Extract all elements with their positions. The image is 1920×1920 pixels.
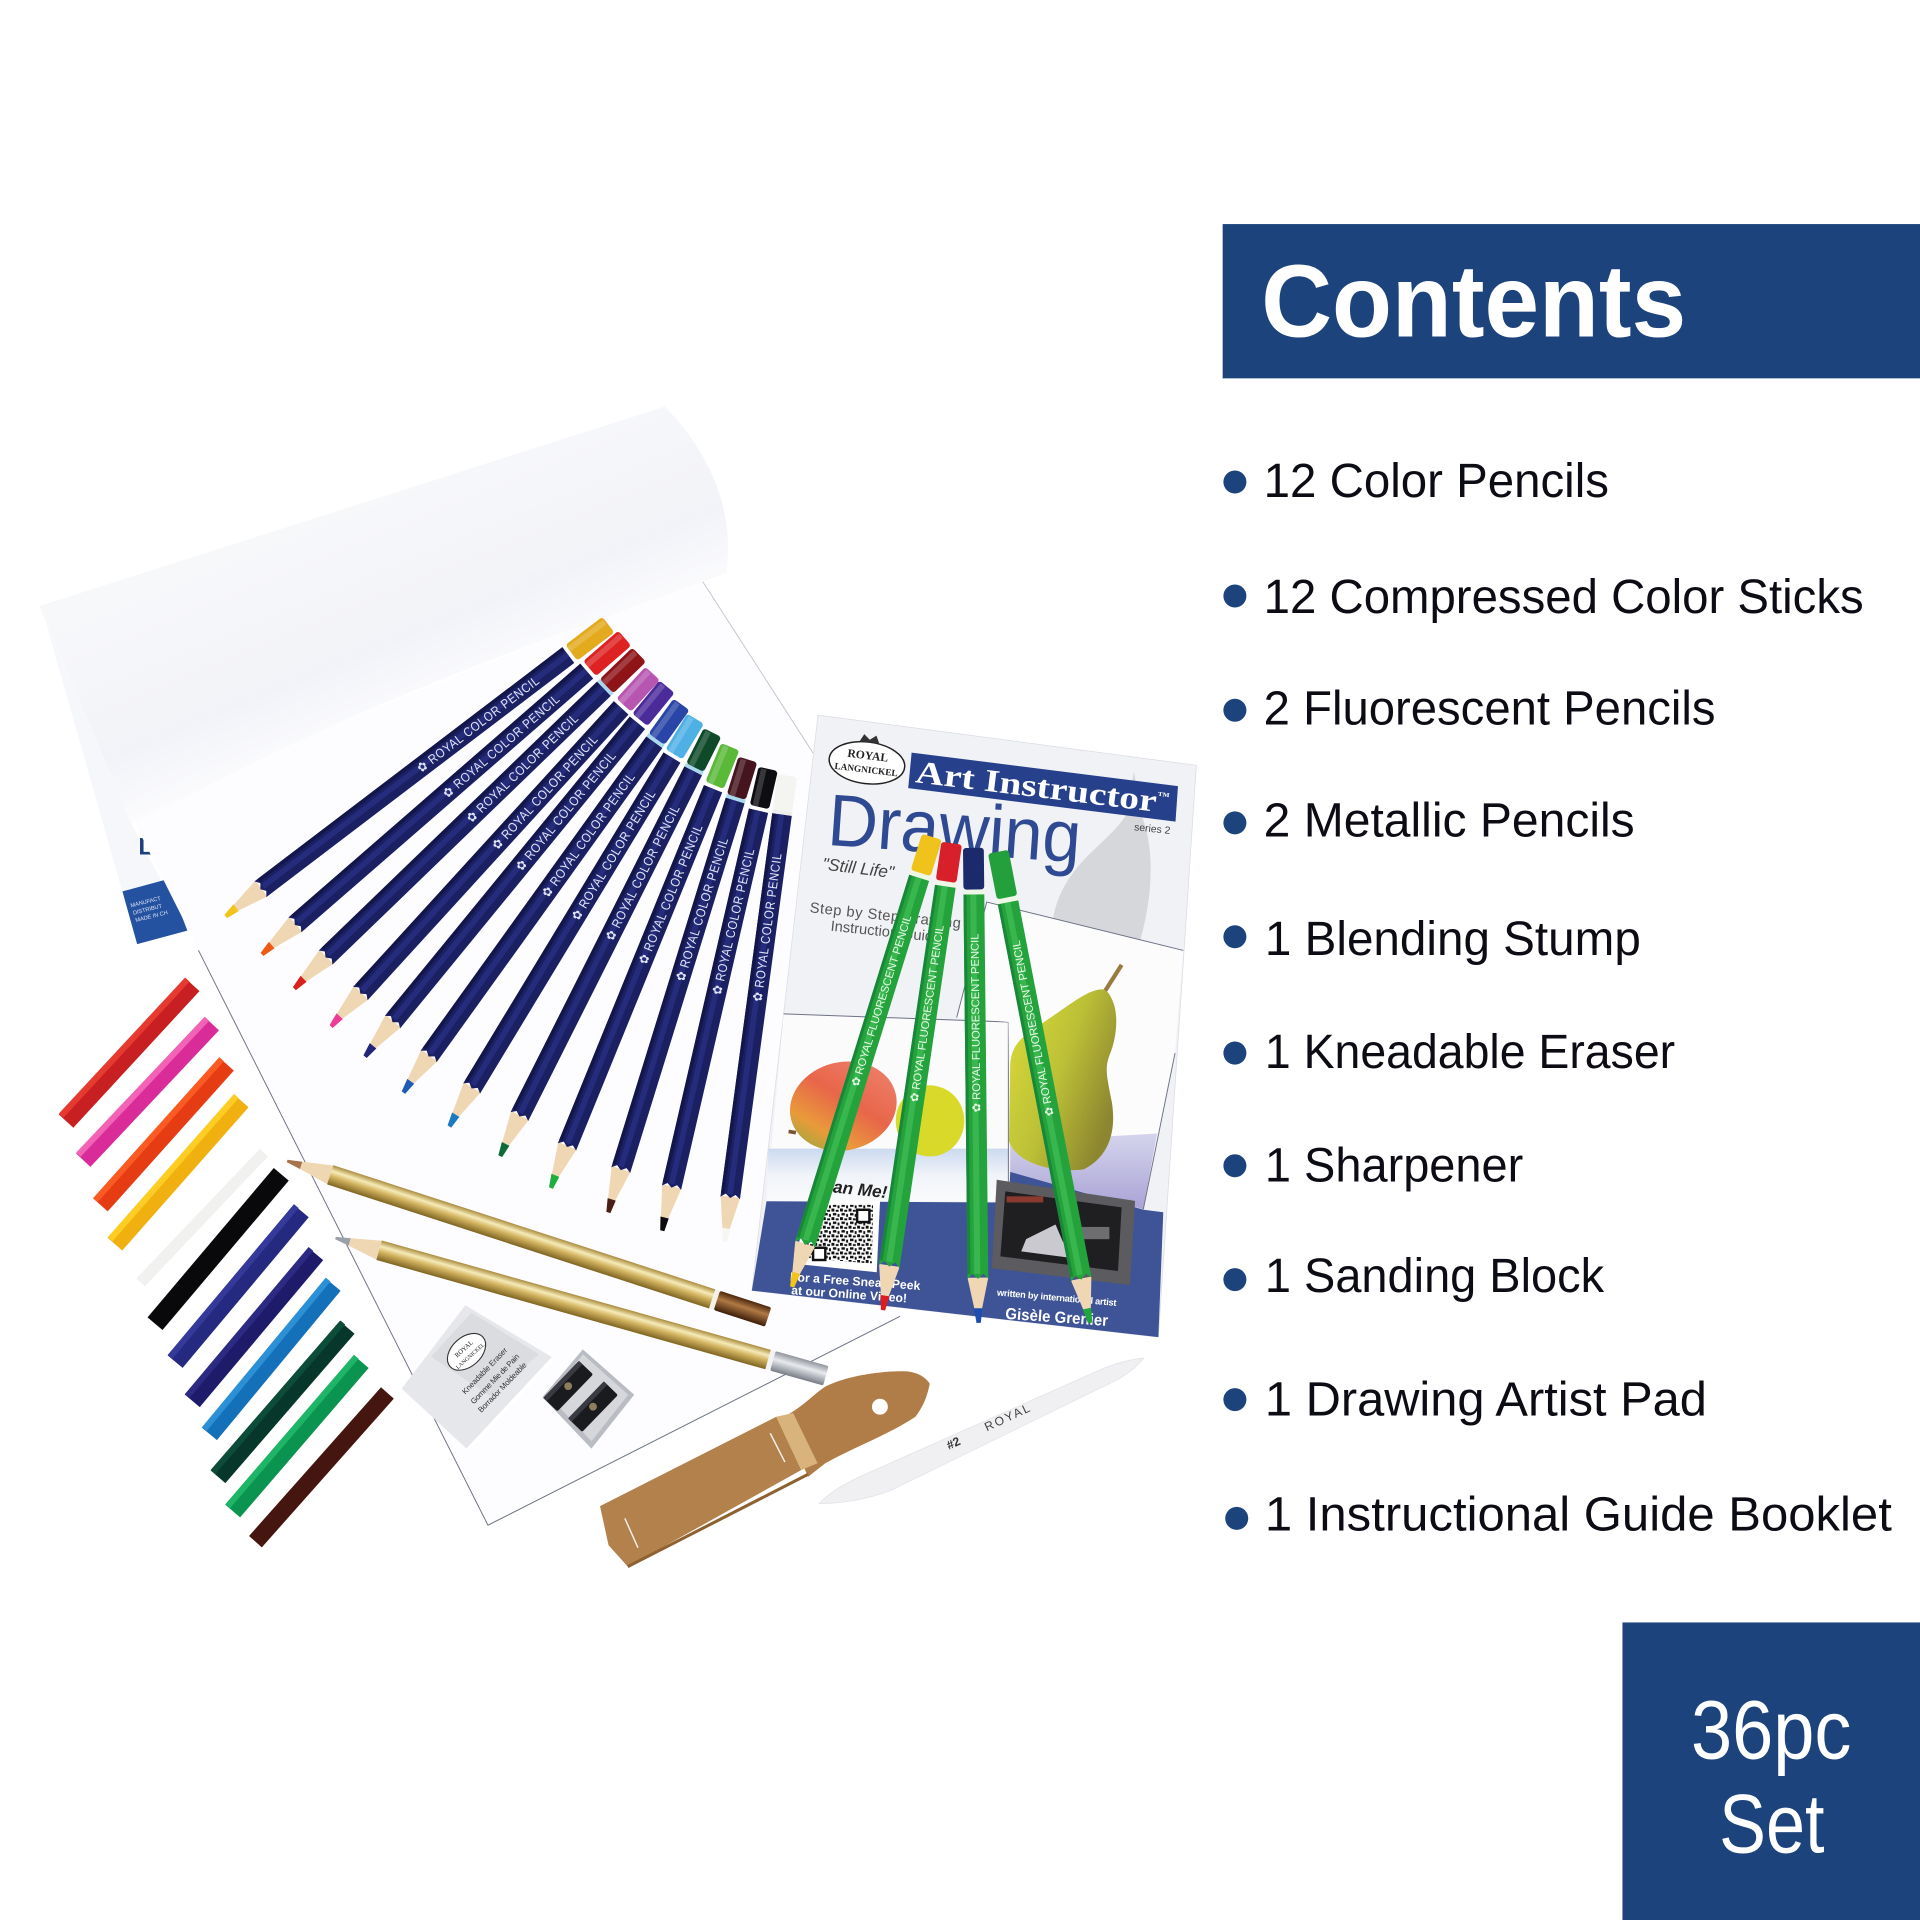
- fluorescent pencil red: ✿ ROYAL FLUORESCENT PENCIL: [909, 924, 947, 1103]
- color pencil 7: [440, 714, 704, 1131]
- still life label: "Still Life": [821, 854, 896, 882]
- eraser logo: ROYAL: [454, 1339, 475, 1359]
- eraser label: Kneadable Eraser: [460, 1346, 510, 1396]
- artist drawing pad: [39, 407, 900, 1525]
- stick: dark green: [213, 1322, 347, 1477]
- fluorescent pencil green: ✿ ROYAL FLUORESCENT PENCIL: [1011, 939, 1057, 1117]
- fluorescent pencil blue: ✿ ROYAL FLUORESCENT PENCIL: [969, 933, 983, 1112]
- fluorescent pencil red: [872, 842, 962, 1312]
- fluorescent pencil green: [988, 850, 1100, 1325]
- instructional guide booklet: [752, 715, 1196, 1337]
- gold pencil with copper cap: [284, 1151, 771, 1327]
- step by step label: Step by Step Drawing: [809, 900, 962, 932]
- color pencil 11: [652, 767, 778, 1233]
- step by step label: Instruction Guide: [830, 919, 942, 946]
- color pencil 10: ✿ ROYAL COLOR PENCIL: [673, 836, 731, 983]
- ghost pear on cover: [1053, 771, 1151, 940]
- list item: drawing artist pad: 1 Drawing Artist Pad: [1265, 1374, 1707, 1427]
- 12 compressed color sticks: [61, 980, 387, 1542]
- pear panel: [957, 902, 1183, 1209]
- video call to action: at our Online Video!: [791, 1283, 908, 1305]
- color pencil 8: ✿ ROYAL COLOR PENCIL: [602, 803, 683, 943]
- author credit: [996, 1287, 1117, 1330]
- list item: metallic pencils: 2 Metallic Pencils: [1264, 794, 1635, 847]
- eraser label: [460, 1346, 529, 1414]
- color pencil 1: [219, 617, 614, 924]
- color pencil 5: [357, 680, 675, 1062]
- blue bottom band: [752, 1172, 1163, 1337]
- video call to action: [790, 1270, 921, 1305]
- color pencil 8: [491, 728, 721, 1160]
- author photo: [992, 1180, 1135, 1285]
- 36pc set badge: [1622, 1622, 1920, 1920]
- color pencil 1: ✿ ROYAL COLOR PENCIL: [414, 673, 542, 776]
- 12 color pencils: [219, 617, 797, 1243]
- eraser label: Gomme Mie de Pain: [469, 1352, 521, 1406]
- fluorescent pencil yellow: [782, 834, 942, 1290]
- pad back cover with blue label: [47, 624, 187, 944]
- rolled over page: [39, 407, 728, 823]
- sanding block handle: [781, 1371, 930, 1477]
- logo: [827, 730, 908, 788]
- pad back cover with blue label: L: [138, 834, 153, 861]
- stick: orange: [96, 1059, 227, 1205]
- pad back cover with blue label: MADE IN CH: [135, 910, 169, 924]
- list item: compressed color sticks: 12 Compressed Color Sticks: [1264, 571, 1864, 624]
- left still life panel: [767, 1014, 1008, 1201]
- color pencil 4: [323, 667, 660, 1033]
- pad back cover with blue label: DISTRIBUT: [133, 903, 163, 917]
- contents heading banner: [1223, 224, 1920, 378]
- logo: LANGNICKEL: [834, 762, 898, 779]
- color pencil 11: ✿ ROYAL COLOR PENCIL: [709, 847, 758, 996]
- color pencil 6: [395, 699, 690, 1098]
- color pencil 2: [255, 631, 631, 961]
- stick: white: [132, 1145, 261, 1280]
- color pencil 5: ✿ ROYAL COLOR PENCIL: [513, 748, 619, 874]
- color pencil 10: [598, 757, 757, 1215]
- eraser logo: LANGNICKEL: [455, 1342, 487, 1371]
- logo: ROYAL: [847, 747, 889, 765]
- stick: brown: [255, 1393, 387, 1542]
- video call to action: For a Free Sneak Peek: [790, 1270, 921, 1293]
- stick: navy: [170, 1206, 301, 1362]
- pad back cover with blue label: MANUFACT: [130, 896, 162, 909]
- color pencil 9: ✿ ROYAL COLOR PENCIL: [635, 822, 706, 966]
- fluorescent pencil blue: [963, 848, 989, 1323]
- list item: fluorescent pencils: 2 Fluorescent Pencils: [1264, 683, 1716, 736]
- color pencil 3: [287, 648, 646, 995]
- color pencil 7: ✿ ROYAL COLOR PENCIL: [568, 787, 659, 923]
- list item: color pencils: 12 Color Pencils: [1264, 455, 1609, 508]
- color pencil 12: ✿ ROYAL COLOR PENCIL: [750, 852, 785, 1002]
- sanding block pad: [600, 1417, 801, 1567]
- list item: blending stump: 1 Blending Stump: [1265, 913, 1641, 966]
- 36pc set badge: Set: [1719, 1778, 1824, 1871]
- sharpener: [542, 1349, 634, 1449]
- color pencil 2: ✿ ROYAL COLOR PENCIL: [440, 691, 563, 801]
- step by step label: [809, 900, 962, 946]
- author credit: written by international artist: [996, 1287, 1117, 1308]
- contents heading banner: Contents: [1261, 244, 1686, 359]
- blending stump: ROYAL: [982, 1400, 1034, 1434]
- art instructor banner: ™: [1157, 790, 1170, 803]
- art instructor banner: [908, 753, 1178, 822]
- stick: green: [228, 1357, 361, 1511]
- eraser label: Borrador Moldeable: [476, 1361, 529, 1414]
- list item: sharpener: 1 Sharpener: [1265, 1140, 1523, 1193]
- sanding block: [600, 1371, 930, 1567]
- eraser logo: [440, 1326, 493, 1378]
- stick: red: [61, 980, 192, 1121]
- pad front sheet: [127, 578, 900, 1525]
- color pencil 6: ✿ ROYAL COLOR PENCIL: [539, 770, 638, 900]
- series label: series 2: [1134, 822, 1171, 837]
- color pencil 3: ✿ ROYAL COLOR PENCIL: [463, 711, 581, 825]
- gold pencil with silver cap: [333, 1228, 829, 1386]
- scan me text: Scan Me!: [811, 1174, 889, 1202]
- color pencil 12: [715, 774, 797, 1243]
- stick: black: [155, 1174, 281, 1324]
- stick: yellow: [110, 1096, 241, 1244]
- blending stump: #2: [944, 1434, 963, 1453]
- author credit: Gisèle Grenier: [1005, 1306, 1109, 1330]
- stick: blue: [204, 1280, 333, 1434]
- 2 fluorescent pencils (four shown): [782, 834, 1100, 1325]
- stick: pink: [78, 1019, 212, 1160]
- staples: [625, 1433, 785, 1548]
- color pencil 9: [541, 743, 739, 1191]
- color pencil 4: ✿ ROYAL COLOR PENCIL: [489, 732, 601, 852]
- art instructor banner: Art Instructor: [914, 754, 1112, 813]
- 2 metallic pencils: [284, 1151, 829, 1386]
- contents list: [1223, 455, 1892, 1542]
- list item: instructional guide booklet: 1 Instructional Guide Booklet: [1265, 1489, 1892, 1542]
- fluorescent pencil yellow: ✿ ROYAL FLUORESCENT PENCIL: [850, 914, 914, 1088]
- kneadable eraser: [402, 1305, 553, 1450]
- list item: sanding block: 1 Sanding Block: [1265, 1250, 1604, 1303]
- list item: kneadable eraser: 1 Kneadable Eraser: [1265, 1026, 1675, 1079]
- QR code: [793, 1201, 880, 1272]
- stick: dark purple: [187, 1249, 316, 1401]
- 36pc set badge: 36pc: [1691, 1683, 1851, 1776]
- drawing title: Drawing: [825, 778, 1084, 879]
- blending stump: [819, 1358, 1144, 1504]
